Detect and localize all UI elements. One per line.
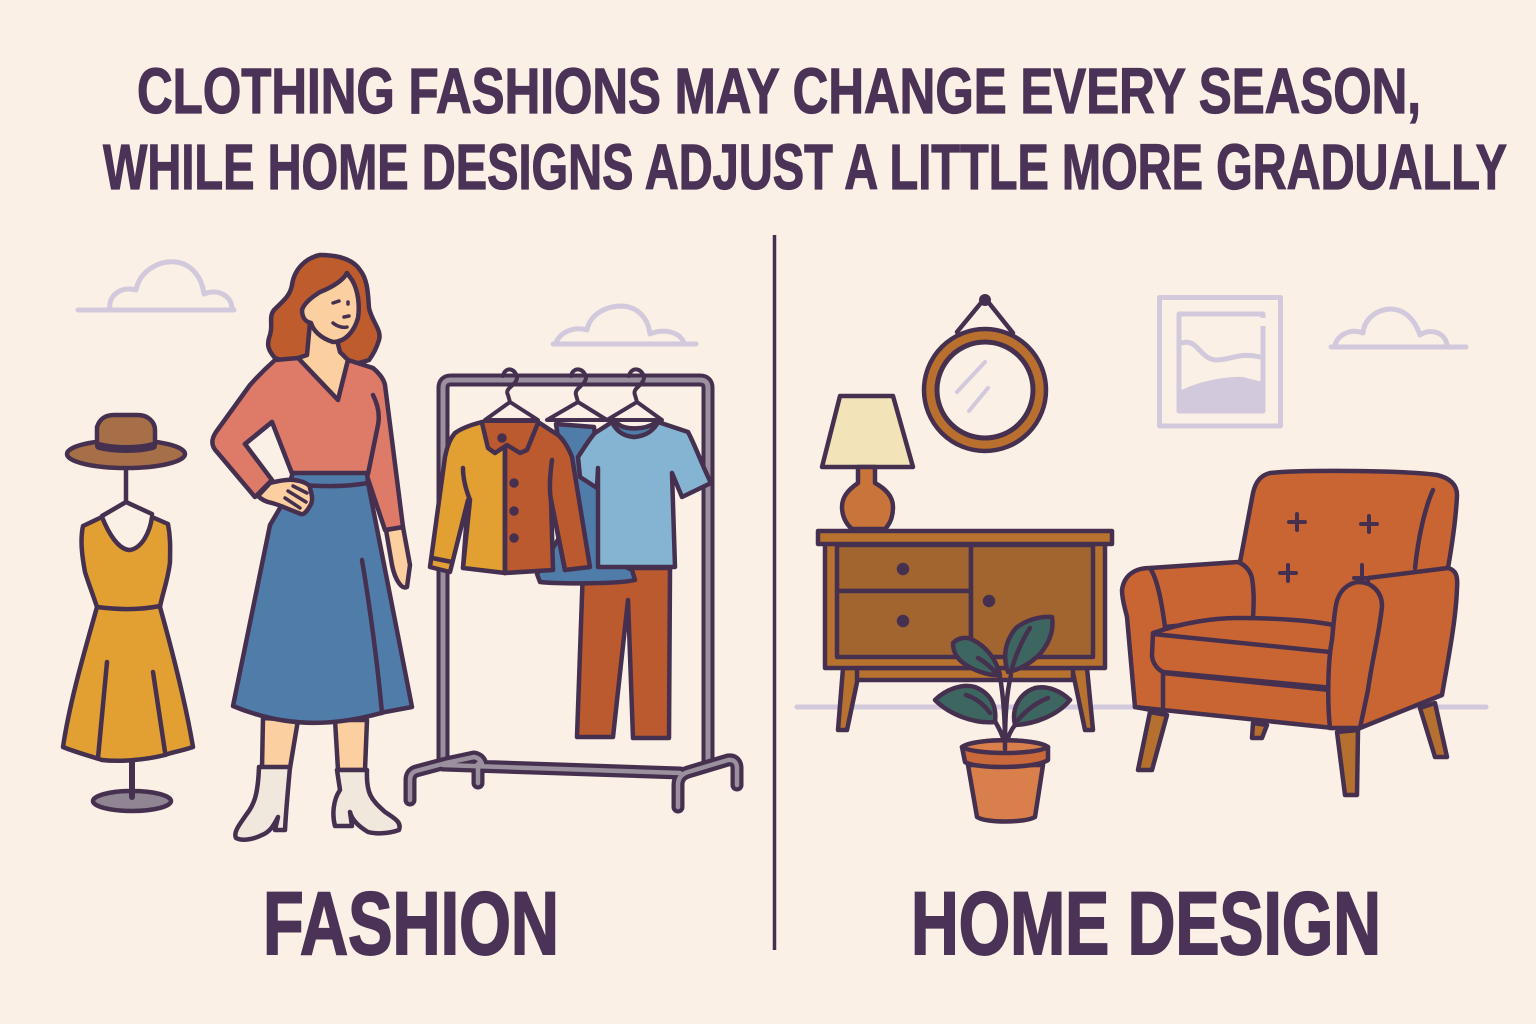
center divider	[773, 235, 776, 950]
neck	[298, 322, 348, 400]
skirt	[233, 473, 412, 723]
tufts	[1280, 514, 1377, 581]
clothing rack	[410, 369, 737, 807]
title	[103, 55, 1507, 203]
right arm side	[1360, 568, 1457, 728]
icon: cloud home	[1331, 309, 1466, 347]
blue garment behind	[537, 424, 635, 583]
mannequin with dress and hat	[63, 415, 193, 811]
right leg	[335, 720, 367, 770]
woman	[212, 255, 412, 840]
blue tshirt	[578, 422, 711, 567]
heading: home design: HOME DESIGN	[911, 873, 1381, 973]
hanger	[102, 502, 152, 516]
jacket	[430, 422, 505, 573]
lamp	[822, 396, 913, 529]
left arm	[1122, 562, 1254, 712]
seat cushion	[1152, 618, 1333, 688]
icon: cloud right	[553, 306, 696, 344]
armchair	[1122, 471, 1457, 795]
sideboard	[818, 531, 1112, 730]
icon: cloud left	[78, 262, 234, 310]
potted plant	[935, 617, 1070, 822]
chair base	[1135, 673, 1333, 728]
mannequin neck	[124, 466, 128, 502]
chair back	[1240, 471, 1457, 640]
picture frame	[1160, 298, 1280, 426]
jacket collar	[482, 423, 538, 453]
hair	[268, 255, 380, 367]
hangers	[485, 369, 662, 420]
mannequin stand	[129, 758, 135, 800]
chair legs	[1138, 703, 1447, 795]
panel: fashion	[63, 255, 737, 840]
left leg	[262, 718, 298, 768]
rack frame	[410, 380, 737, 807]
heading: fashion: FASHION	[263, 873, 559, 973]
back seam	[1415, 490, 1433, 568]
left boot	[235, 767, 290, 840]
panel: home design	[797, 294, 1486, 822]
floor line	[797, 704, 1486, 710]
hat	[67, 440, 185, 468]
top	[212, 358, 403, 530]
right hand	[386, 527, 410, 588]
hand on hip	[258, 480, 312, 514]
right arm front	[1328, 582, 1382, 728]
right boot	[333, 770, 400, 833]
pants	[577, 568, 670, 738]
dress	[63, 517, 193, 761]
face	[302, 273, 359, 342]
wall mirror	[924, 294, 1046, 451]
